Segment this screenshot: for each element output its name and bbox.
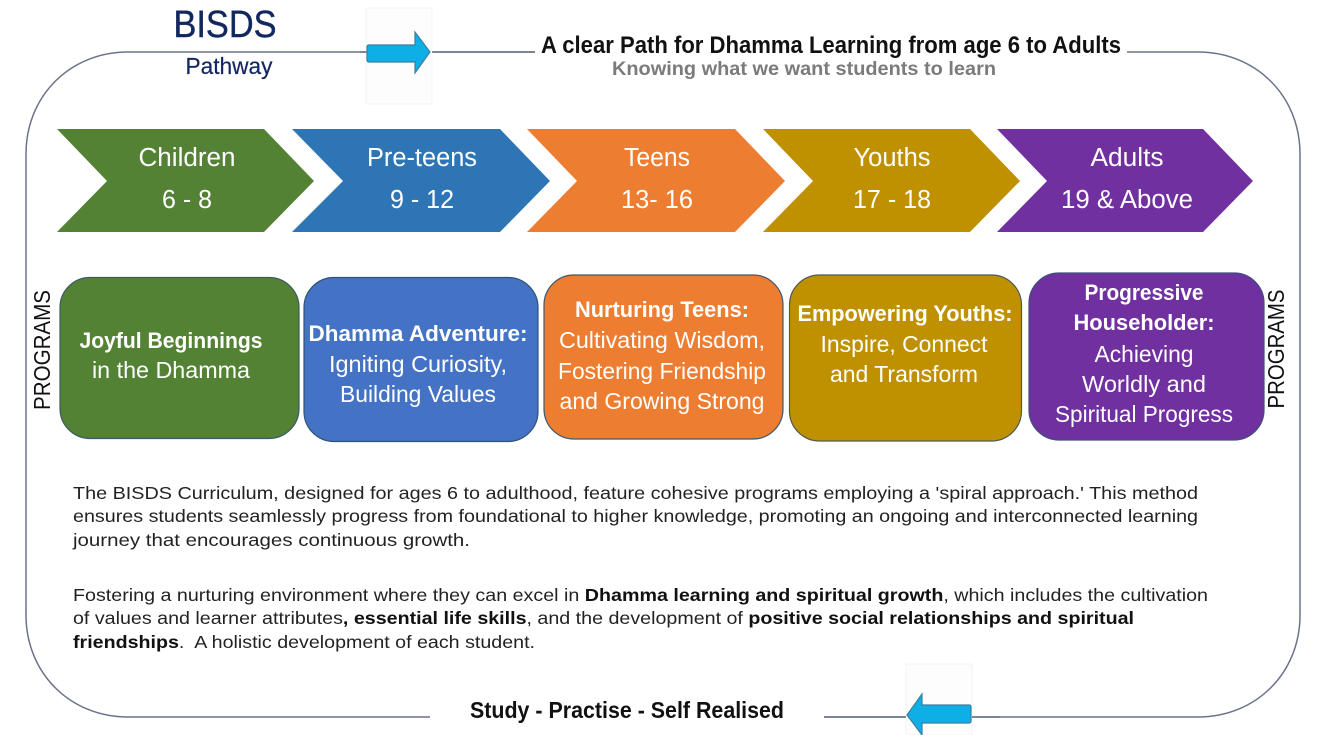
chevron: Children: Children: [138, 144, 236, 172]
card: Progressive Householder: Householder:: [1074, 310, 1214, 335]
chevron: Adults: Adults: [1090, 144, 1164, 172]
chevron: Children: 6 - 8: [162, 186, 212, 214]
text block: curriculum: The BISDS Curriculum, designed for ages 6 to adulthood, feature cohesive programs employing a 'spiral approach.' This method: [73, 483, 1198, 503]
card: Progressive Householder: Progressive: [1084, 280, 1204, 305]
right label: PROGRAMS: PROGRAMS: [1263, 290, 1289, 408]
card: Progressive Householder: Worldly and: [1082, 371, 1206, 397]
card: Nurturing Teens: Fostering Friendship: [558, 358, 766, 384]
text block: environment: Fostering a nurturing environment where they can excel in Dhamma learning and spiritual growth , which includes the cultivation: [73, 585, 1208, 605]
icon: left arrow: [824, 664, 1000, 735]
card: Empowering Youths: [790, 275, 1022, 441]
card: Empowering Youths: and Transform: [830, 361, 978, 387]
card: Dhamma Adventure: [304, 278, 538, 442]
subtitle: Pathway: Pathway: [186, 53, 273, 79]
chevron row: [57, 129, 1253, 232]
footer: Study - Practise - Self Realised: Study - Practise - Self Realised: [470, 697, 784, 723]
card: Empowering Youths: Empowering Youths:: [798, 301, 1012, 326]
chevron: Pre-teens: 9 - 12: [390, 186, 454, 214]
chevron: Teens: [527, 129, 785, 232]
text block: curriculum: [72, 483, 1198, 550]
text block: environment: friendships . A holistic development of each student.: [73, 632, 535, 652]
subheading: Knowing what we want students to learn: [612, 59, 996, 80]
text block: curriculum: journey that encourages continuous growth.: [72, 530, 470, 550]
chevron: Teens: Teens: [624, 144, 690, 172]
card: Dhamma Adventure: Dhamma Adventure:: [308, 321, 528, 346]
chevron: Youths: Youths: [854, 144, 930, 172]
card: Empowering Youths: Inspire, Connect: [820, 331, 988, 357]
card: Joyful Beginnings: [60, 278, 299, 438]
chevron: Children: [57, 129, 314, 232]
chevron: Youths: [763, 129, 1020, 232]
text block: environment: of values and learner attributes , essential life skills , and the development of positive social relationships and spiritual: [73, 608, 1134, 628]
chevron: Teens: 13- 16: [621, 186, 693, 214]
chevron: Adults: 19 & Above: [1061, 186, 1193, 214]
card: Joyful Beginnings: Joyful Beginnings: [80, 328, 262, 353]
text block: environment: [73, 585, 1208, 652]
title: BISDS: BISDS: [174, 4, 276, 46]
card: Nurturing Teens: Cultivating Wisdom,: [559, 327, 765, 353]
card: Progressive Householder: Spiritual Progress: [1055, 401, 1233, 427]
chevron: Youths: 17 - 18: [853, 186, 931, 214]
card: Progressive Householder: [1029, 273, 1264, 440]
card: Nurturing Teens: and Growing Strong: [560, 388, 764, 414]
chevron: Pre-teens: Pre-teens: [367, 144, 477, 172]
heading: A clear Path for Dhamma Learning from age 6 to Adults: [541, 32, 1121, 59]
card: Dhamma Adventure: Igniting Curiosity,: [329, 351, 507, 377]
left label: PROGRAMS: PROGRAMS: [29, 290, 55, 410]
card: Progressive Householder: Achieving: [1094, 341, 1194, 367]
card: Dhamma Adventure: Building Values: [340, 381, 496, 407]
chevron: Pre-teens: [292, 129, 550, 232]
icon: right arrow: [360, 8, 535, 104]
program cards: [60, 273, 1264, 442]
card: Joyful Beginnings: in the Dhamma: [92, 357, 250, 383]
card: Nurturing Teens: Nurturing Teens:: [575, 297, 749, 322]
chevron: Adults: [997, 129, 1253, 232]
text block: curriculum: ensures students seamlessly progress from foundational to higher knowledge, promoting an ongoing and interconnected learning: [73, 506, 1198, 526]
card: Nurturing Teens: [544, 275, 783, 439]
